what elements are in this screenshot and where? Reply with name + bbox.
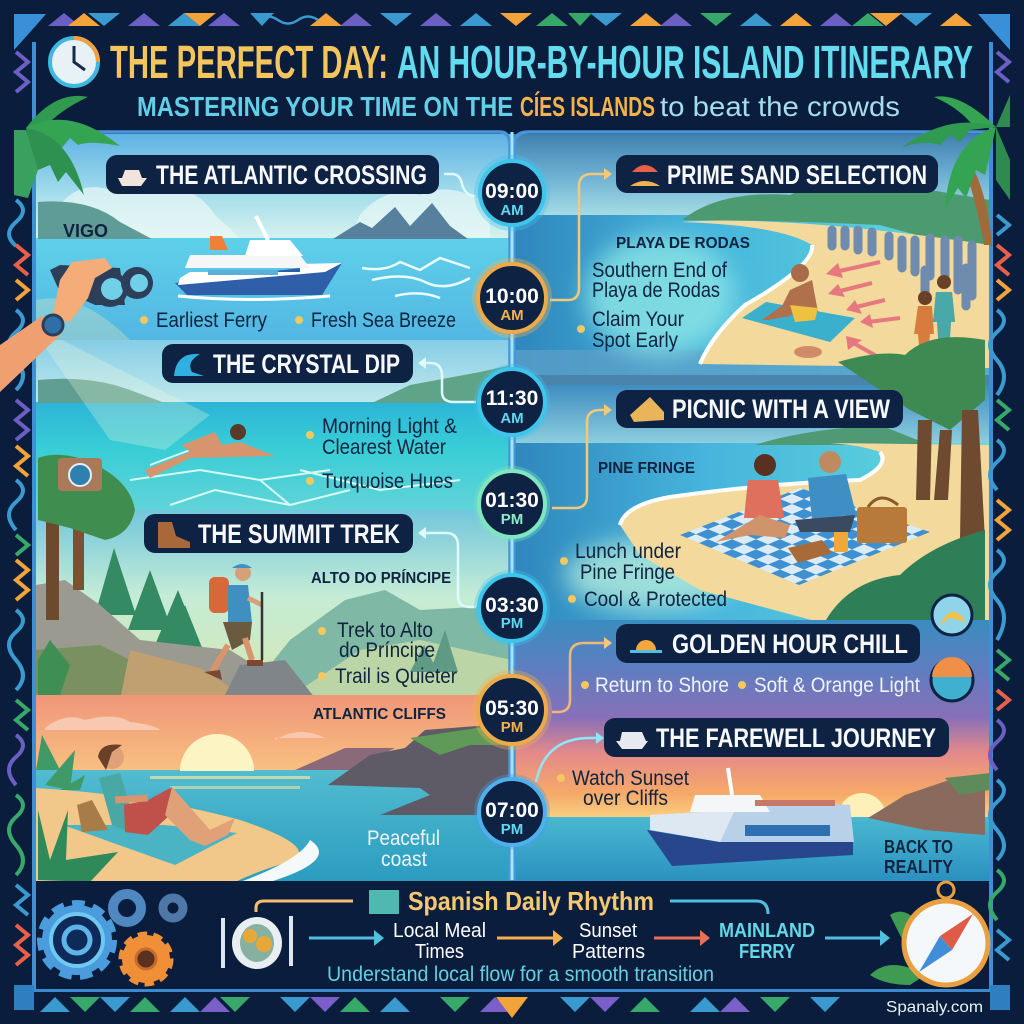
timeline node 03:30 xyxy=(474,570,550,646)
footer icons: gears xyxy=(42,894,183,983)
palm right xyxy=(902,95,1010,245)
bottom band xyxy=(36,881,989,989)
text block: descriptions: Trek to Alto xyxy=(337,619,433,642)
footer flow: MAINLAND xyxy=(719,920,815,942)
timeline node 11:30: 11:30 xyxy=(486,387,538,410)
scene: Prime sand xyxy=(512,134,990,392)
icon: swimmer xyxy=(145,424,275,478)
text block: descriptions: Pine Fringe xyxy=(580,561,675,584)
timeline node 11:30 xyxy=(474,364,550,440)
card: Farewell header xyxy=(604,718,949,757)
scene: Sunset shore xyxy=(36,695,512,882)
ornament band: right xyxy=(990,52,1009,960)
footer flow xyxy=(309,920,890,963)
text block: descriptions: Soft & Orange Light xyxy=(754,674,920,697)
subtitle: CÍES ISLANDS xyxy=(520,91,655,122)
place labels: Peaceful xyxy=(367,827,440,850)
place labels: VIGO xyxy=(63,221,108,241)
footer icon: plate xyxy=(221,916,293,969)
text block: descriptions: Claim Your xyxy=(592,308,684,331)
place labels xyxy=(63,221,953,877)
timeline node 09:00: 09:00 xyxy=(485,180,539,203)
scene: Farewell xyxy=(512,718,990,882)
scene: Golden hour xyxy=(512,620,990,720)
text block: descriptions: Spot Early xyxy=(592,329,678,352)
ornament band: bottom xyxy=(14,985,1010,1018)
text block: descriptions xyxy=(156,259,920,810)
text block: descriptions: Fresh Sea Breeze xyxy=(311,309,456,332)
icon: camera xyxy=(58,458,102,491)
footer flow: Patterns xyxy=(572,941,645,963)
card: Prime Sand header xyxy=(616,155,938,193)
footer flow: Times xyxy=(415,941,464,963)
timeline node 07:00 xyxy=(474,774,550,850)
timeline node 01:30: 01:30 xyxy=(485,489,539,512)
timeline node 10:00: 10:00 xyxy=(485,285,539,308)
text block: descriptions: Return to Shore xyxy=(595,674,729,697)
footer flow: Local Meal xyxy=(393,920,486,942)
text block: descriptions: over Cliffs xyxy=(583,787,668,810)
icon: ferry morning xyxy=(175,216,342,300)
icon: relaxing man xyxy=(77,744,235,846)
subtitle xyxy=(137,91,900,122)
timeline spine xyxy=(510,132,514,880)
icon: clock xyxy=(50,38,98,86)
footer heading xyxy=(256,886,768,916)
timeline node 07:00: 07:00 xyxy=(485,799,539,822)
scene: Summit trek xyxy=(36,455,512,700)
timeline node 05:30 xyxy=(472,670,552,750)
place labels: coast xyxy=(381,848,427,871)
text block: descriptions: Cool & Protected xyxy=(584,588,727,611)
icon: speech bubble xyxy=(932,595,972,635)
card: Crystal Dip header xyxy=(162,344,413,383)
footer caption: Understand local flow for a smooth transition xyxy=(327,963,714,986)
place labels: BACK TO xyxy=(884,837,953,857)
subtitle: to beat the crowds xyxy=(660,91,900,122)
card: Summit Trek header xyxy=(144,514,413,553)
text block: descriptions: Playa de Rodas xyxy=(592,279,720,302)
text block: descriptions: Watch Sunset xyxy=(572,767,689,790)
icon: sunset badge xyxy=(931,657,973,701)
timeline node 05:30: PM xyxy=(501,719,523,736)
text block: descriptions: Earliest Ferry xyxy=(156,309,267,332)
ornament band: top xyxy=(14,13,1010,50)
scene: Picnic xyxy=(512,385,990,625)
panel: left scenes xyxy=(36,134,512,882)
tree and foliage: right side xyxy=(826,337,985,620)
timeline node 11:30: AM xyxy=(500,410,524,427)
timeline node 03:30: PM xyxy=(501,615,523,632)
icon: binoculars and hand xyxy=(0,258,153,392)
text block: descriptions: Southern End of xyxy=(592,259,727,282)
timeline node 09:00 xyxy=(474,155,550,231)
place labels: PINE FRINGE xyxy=(598,460,695,477)
card: Farewell header: THE FAREWELL JOURNEY xyxy=(656,723,936,753)
watermark: Spanaly.com xyxy=(886,999,983,1016)
text block: descriptions: Clearest Water xyxy=(322,436,446,459)
icon: hiker xyxy=(204,564,263,680)
ornament band: left xyxy=(9,52,28,965)
timeline node 05:30: 05:30 xyxy=(485,697,539,720)
card: Golden Hour header xyxy=(616,624,920,663)
footer icon: compass xyxy=(870,882,988,985)
icon: ferry evening xyxy=(647,768,854,866)
place labels: REALITY xyxy=(884,857,953,877)
card: Golden Hour header: GOLDEN HOUR CHILL xyxy=(672,629,908,659)
place labels: PLAYA DE RODAS xyxy=(616,235,750,252)
card: Prime Sand header: PRIME SAND SELECTION xyxy=(667,160,927,190)
footer heading: Spanish Daily Rhythm xyxy=(408,886,654,916)
title xyxy=(110,36,973,88)
footer flow: FERRY xyxy=(739,941,796,963)
timeline node 01:30 xyxy=(474,466,550,542)
subtitle: MASTERING YOUR TIME ON THE xyxy=(137,91,513,122)
connectors xyxy=(418,168,612,782)
text block: descriptions: Morning Light & xyxy=(322,415,457,438)
card: Picnic header xyxy=(616,390,903,428)
card: Atlantic Crossing header: THE ATLANTIC CROSSING xyxy=(156,160,427,190)
title: THE PERFECT DAY: xyxy=(110,36,388,88)
timeline node 10:00 xyxy=(472,258,552,338)
text block: descriptions: Turquoise Hues xyxy=(322,470,453,493)
scene: Crystal dip xyxy=(36,340,512,514)
text block: descriptions: do Príncipe xyxy=(339,639,435,662)
text block: descriptions: Lunch under xyxy=(575,540,681,563)
card: Crystal Dip header: THE CRYSTAL DIP xyxy=(213,349,400,379)
card: Summit Trek header: THE SUMMIT TREK xyxy=(198,519,400,549)
timeline node 07:00: PM xyxy=(501,821,523,838)
timeline node 09:00: AM xyxy=(500,202,524,219)
palm left xyxy=(14,96,120,198)
place labels: ATLANTIC CLIFFS xyxy=(313,706,446,723)
footer flow: Sunset xyxy=(579,920,637,942)
timeline node 03:30: 03:30 xyxy=(485,594,539,617)
card: Atlantic Crossing header xyxy=(106,155,439,194)
place labels: ALTO DO PRÍNCIPE xyxy=(311,568,451,587)
text block: descriptions: Trail is Quieter xyxy=(335,665,457,688)
bullets xyxy=(140,316,746,782)
timeline node 10:00: AM xyxy=(500,307,524,324)
timeline node 01:30: PM xyxy=(501,511,523,528)
panel: right scenes xyxy=(512,134,990,882)
scene: Atlantic crossing xyxy=(36,134,512,342)
card: Picnic header: PICNIC WITH A VIEW xyxy=(672,394,890,424)
